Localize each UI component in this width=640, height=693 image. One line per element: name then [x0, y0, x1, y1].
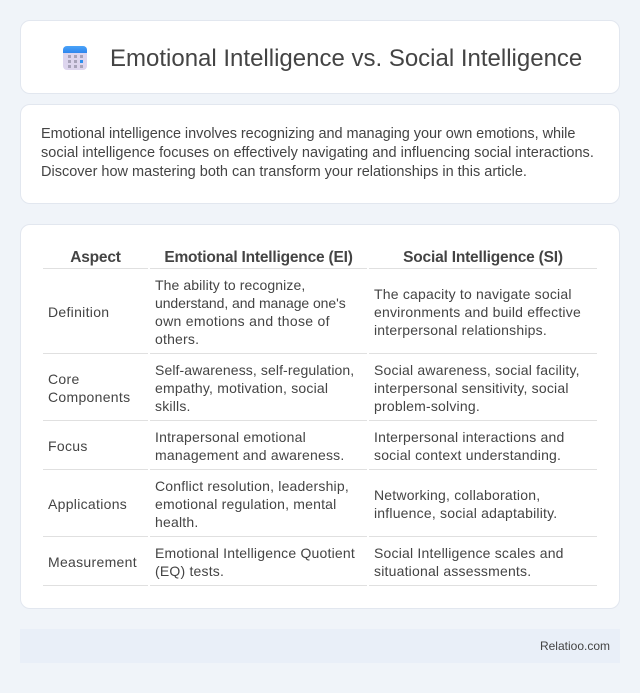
- intro text: Emotional intelligence involves recognizing and managing your own emotions, while: [41, 126, 575, 142]
- comparison table: [43, 249, 597, 586]
- icon: calendar: [63, 46, 87, 70]
- row: Core Components: Core: [48, 371, 80, 387]
- title: Emotional Intelligence vs. Social Intelligence: [110, 45, 582, 72]
- panel: comparison table card: [20, 224, 620, 609]
- row: Focus: Focus: [48, 438, 88, 454]
- row: Applications: Applications: [48, 496, 127, 512]
- row: Measurement: [48, 545, 564, 579]
- row: Applications: health.: [155, 514, 198, 530]
- row: Core Components: problem-solving.: [374, 398, 480, 414]
- row: Focus: Interpersonal interactions and: [374, 429, 564, 445]
- row: Definition: own emotions and those of: [155, 313, 330, 329]
- row: Measurement: Emotional Intelligence Quotient: [155, 545, 355, 561]
- row: Measurement: Social Intelligence scales and: [374, 545, 564, 561]
- row: Applications: Networking, collaboration,: [374, 487, 540, 503]
- row: Applications: Conflict resolution, leadership,: [155, 478, 349, 494]
- row: Definition: The ability to recognize,: [155, 277, 305, 293]
- row: Measurement: Measurement: [48, 554, 137, 570]
- table header: Social Intelligence: Social Intelligence (SI): [403, 249, 563, 266]
- intro text: Discover how mastering both can transform your relationships in this article.: [41, 164, 527, 180]
- panel: title card: [20, 20, 620, 94]
- row: Core Components: Self-awareness, self-regulation,: [155, 362, 354, 378]
- row: Core Components: skills.: [155, 398, 191, 414]
- row: Measurement: (EQ) tests.: [155, 563, 224, 579]
- row: Core Components: empathy, motivation, social: [155, 380, 328, 396]
- intro text: social intelligence focuses on effectively navigating and influencing social interactions.: [41, 145, 594, 161]
- footer brand: Relatioo.com: [540, 639, 610, 653]
- row: Applications: influence, social adaptability.: [374, 505, 557, 521]
- row: Core Components: interpersonal sensitivity, social: [374, 380, 569, 396]
- panel: introduction: [20, 104, 620, 204]
- row: Applications: emotional regulation, mental: [155, 496, 336, 512]
- row: Core Components: Components: [48, 389, 130, 405]
- table header: Emotional Intelligence: Emotional Intelligence (EI): [164, 249, 353, 266]
- row: Definition: others.: [155, 331, 199, 347]
- table header: Aspect: Aspect: [70, 249, 121, 266]
- row: Definition: understand, and manage one's: [155, 295, 346, 311]
- row: Applications: [48, 478, 557, 530]
- row: Focus: management and awareness.: [155, 447, 344, 463]
- row: Definition: [48, 277, 581, 347]
- row: Focus: [48, 429, 564, 463]
- row: Focus: Intrapersonal emotional: [155, 429, 306, 445]
- row: Core Components: Social awareness, social facility,: [374, 362, 580, 378]
- row: Definition: environments and build effective: [374, 304, 581, 320]
- footer bar: [20, 629, 620, 663]
- row: Focus: social context understanding.: [374, 447, 561, 463]
- row: Core Components: [48, 362, 580, 414]
- row: Measurement: situational assessments.: [374, 563, 531, 579]
- row: Definition: Definition: [48, 304, 109, 320]
- row: Definition: The capacity to navigate social: [374, 286, 572, 302]
- row: Definition: interpersonal relationships.: [374, 322, 547, 338]
- intro text: [41, 126, 594, 180]
